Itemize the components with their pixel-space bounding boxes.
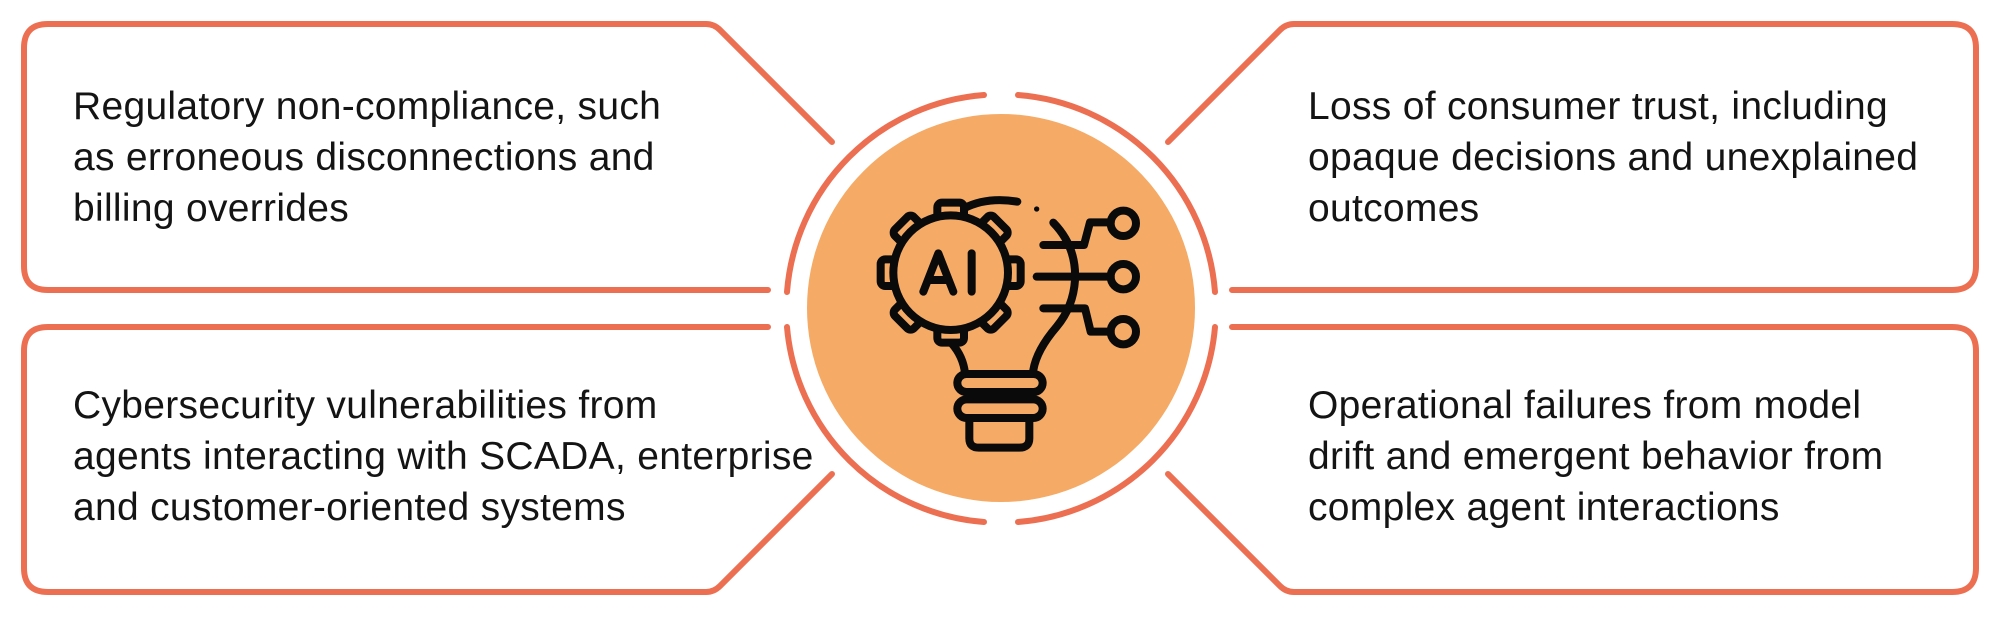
panel: top-left box [24, 24, 832, 290]
orange circle [807, 114, 1195, 502]
text: top-left [73, 85, 661, 230]
text: bottom-right [1308, 384, 1883, 529]
text: top-left: Regulatory non-compliance, such [73, 85, 661, 128]
text: top-left: billing overrides [73, 187, 349, 230]
text: top-right: outcomes [1308, 187, 1479, 230]
text: top-right: opaque decisions and unexplained [1308, 136, 1918, 179]
icon: AI lightbulb [881, 200, 1136, 448]
text: bottom-left [73, 384, 814, 529]
text: top-right: Loss of consumer trust, including [1308, 85, 1888, 128]
text: bottom-right: Operational failures from model [1308, 384, 1861, 427]
text: bottom-right: drift and emergent behavior from [1308, 435, 1883, 478]
text: top-left: as erroneous disconnections and [73, 136, 655, 179]
panel: bottom-right box [1168, 327, 1976, 592]
panel: top-right box [1168, 24, 1976, 290]
text: top-right [1308, 85, 1918, 230]
text: bottom-left: and customer-oriented systems [73, 486, 626, 529]
text: bottom-left: agents interacting with SCADA, enterprise [73, 435, 814, 478]
text: bottom-left: Cybersecurity vulnerabilities from [73, 384, 658, 427]
panel: bottom-left box [24, 327, 832, 592]
ring: outer segmented circle [787, 95, 1215, 522]
text: bottom-right: complex agent interactions [1308, 486, 1780, 529]
